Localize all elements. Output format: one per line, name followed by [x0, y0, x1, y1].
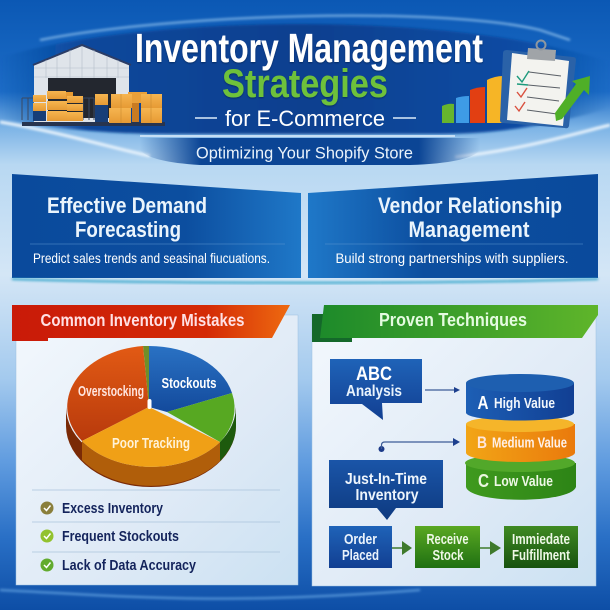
- header ribbon: mistakes: [12, 305, 290, 341]
- callout: abc analysis: ABC: [356, 364, 392, 385]
- header ribbon: mistakes: Common Inventory Mistakes: [40, 310, 245, 330]
- pie chart: Overstocking: [78, 384, 144, 400]
- cylinder chart: C: [478, 471, 489, 491]
- panel: vendor relationship management: Build strong partnerships with suppliers.: [336, 250, 568, 266]
- cylinder chart: A: [478, 393, 488, 413]
- icon: warehouse: [22, 45, 165, 126]
- header ribbon: proven techniques: [312, 305, 598, 342]
- callout: just-in-time inventory: Just-In-Time: [345, 471, 427, 488]
- callout: just-in-time inventory: [329, 460, 443, 520]
- panel: effective demand forecasting: [12, 174, 301, 278]
- pie chart: [66, 346, 236, 487]
- subtitle band: Optimizing Your Shopify Store: [196, 144, 413, 162]
- arrow: receive to fulfillment: [480, 541, 501, 555]
- pie chart: Stockouts: [162, 375, 216, 392]
- cylinder chart: [465, 374, 576, 500]
- pie chart: Poor Tracking: [112, 435, 190, 452]
- header ribbon: proven techniques: Proven Techniques: [379, 310, 527, 330]
- panel: vendor relationship management: Vendor Relationship: [378, 193, 562, 218]
- icon: clipboard: [500, 40, 590, 128]
- panel: proven techniques: [312, 305, 598, 586]
- panel: vendor relationship management: [308, 174, 598, 278]
- title: for E-Commerce: [225, 106, 385, 131]
- panel: effective demand forecasting: Effective Demand: [47, 193, 207, 218]
- list: lack of data accuracy: Lack of Data Accuracy: [62, 557, 197, 574]
- title: [135, 25, 483, 131]
- flow step: order placed: Placed: [342, 548, 379, 564]
- flow step: receive stock: Stock: [432, 548, 464, 564]
- flow step: immediate fulfillment: Fulfillment: [512, 548, 570, 564]
- panel: vendor relationship management: Management: [408, 217, 530, 242]
- list: excess inventory: Excess Inventory: [62, 500, 164, 517]
- flow step: receive stock: [415, 526, 480, 568]
- arrow: order to receive: [392, 541, 412, 555]
- cylinder chart: Medium Value: [492, 434, 567, 452]
- list: frequent stockouts: Frequent Stockouts: [62, 528, 179, 545]
- callout: just-in-time inventory: Inventory: [356, 487, 419, 504]
- panel: effective demand forecasting: Predict sales trends and seasinal fiucuations.: [33, 250, 270, 266]
- callout: abc analysis: [330, 359, 422, 420]
- title: Strategies: [222, 62, 388, 106]
- flow step: order placed: Order: [344, 532, 377, 548]
- title: Inventory Management: [135, 25, 483, 71]
- flow step: order placed: [329, 526, 392, 568]
- cylinder chart: High Value: [494, 395, 555, 412]
- cylinder chart: Low Value: [494, 473, 553, 490]
- arrow: abc to high value: [425, 387, 460, 393]
- cylinder chart: B: [477, 433, 487, 452]
- panel: common inventory mistakes: [12, 305, 298, 585]
- arrow: jit to medium value: [378, 438, 460, 452]
- panel: effective demand forecasting: Forecasting: [75, 217, 181, 242]
- flow step: immediate fulfillment: [504, 526, 578, 568]
- flow step: receive stock: Receive: [426, 532, 468, 548]
- flow step: immediate fulfillment: Immiedate: [512, 532, 570, 548]
- subtitle band: [140, 138, 480, 167]
- icon: bar chart: [442, 76, 503, 123]
- callout: abc analysis: Analysis: [346, 383, 402, 400]
